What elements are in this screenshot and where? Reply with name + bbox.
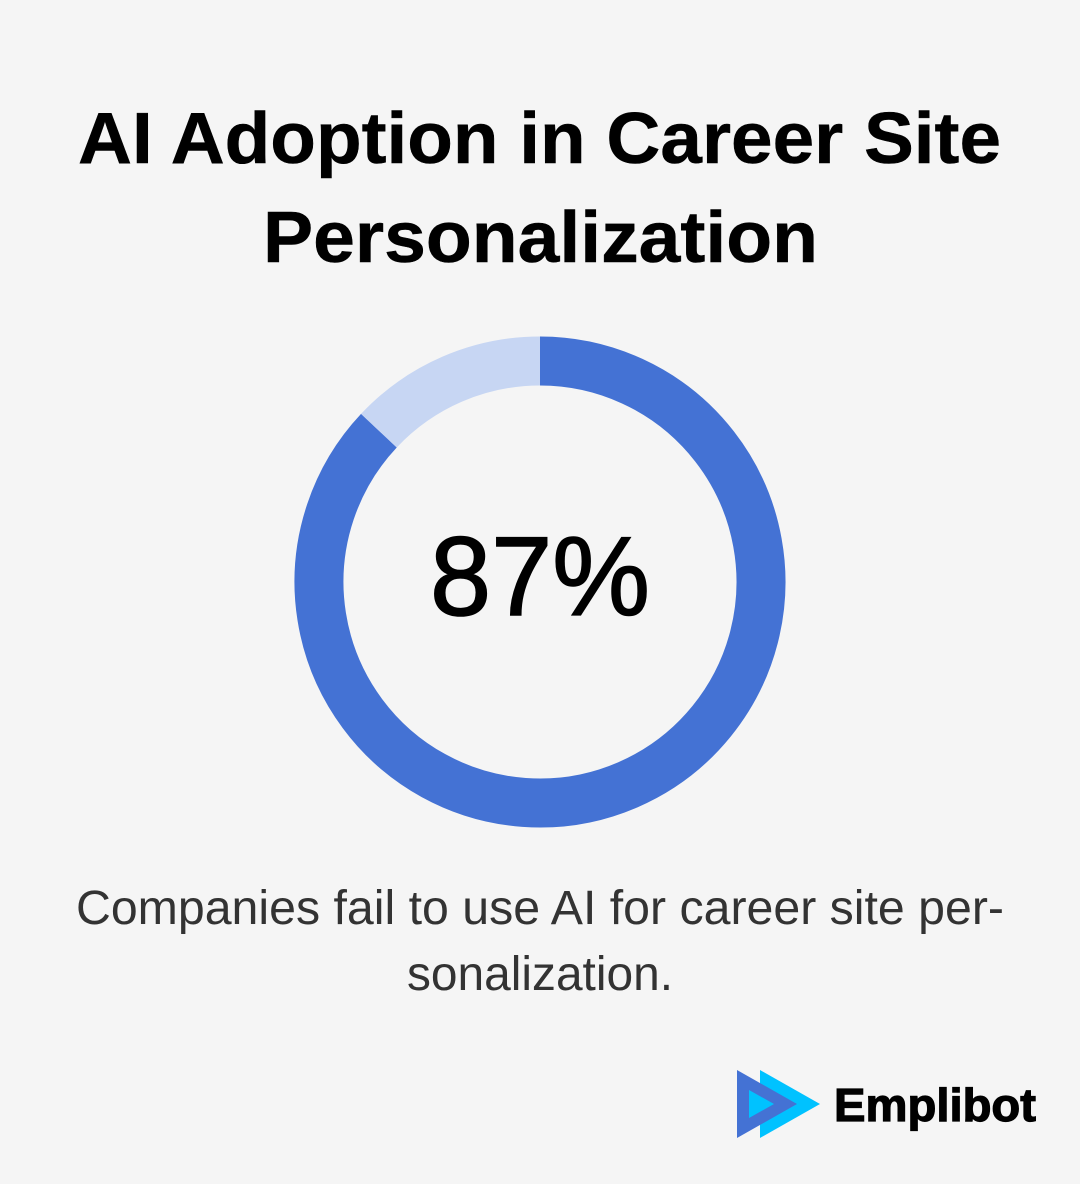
description text: sonalization.: [407, 948, 673, 1001]
title: AI Adoption in Career Site: [78, 99, 1001, 179]
title: Personalization: [263, 198, 818, 278]
description text: [76, 882, 1004, 1001]
logo wordmark: Emplibot: [834, 1079, 1036, 1131]
chart segment: 87% share: [319, 361, 761, 803]
donut chart: 87%: [319, 361, 761, 803]
icon: play triangles: [737, 1070, 820, 1138]
description text: Companies fail to use AI for career site per-: [76, 882, 1004, 935]
logo: Emplibot: [737, 1070, 1036, 1138]
title: [78, 99, 1001, 278]
chart segment: remaining 13%: [379, 361, 540, 431]
donut value: 87%: [430, 514, 650, 639]
